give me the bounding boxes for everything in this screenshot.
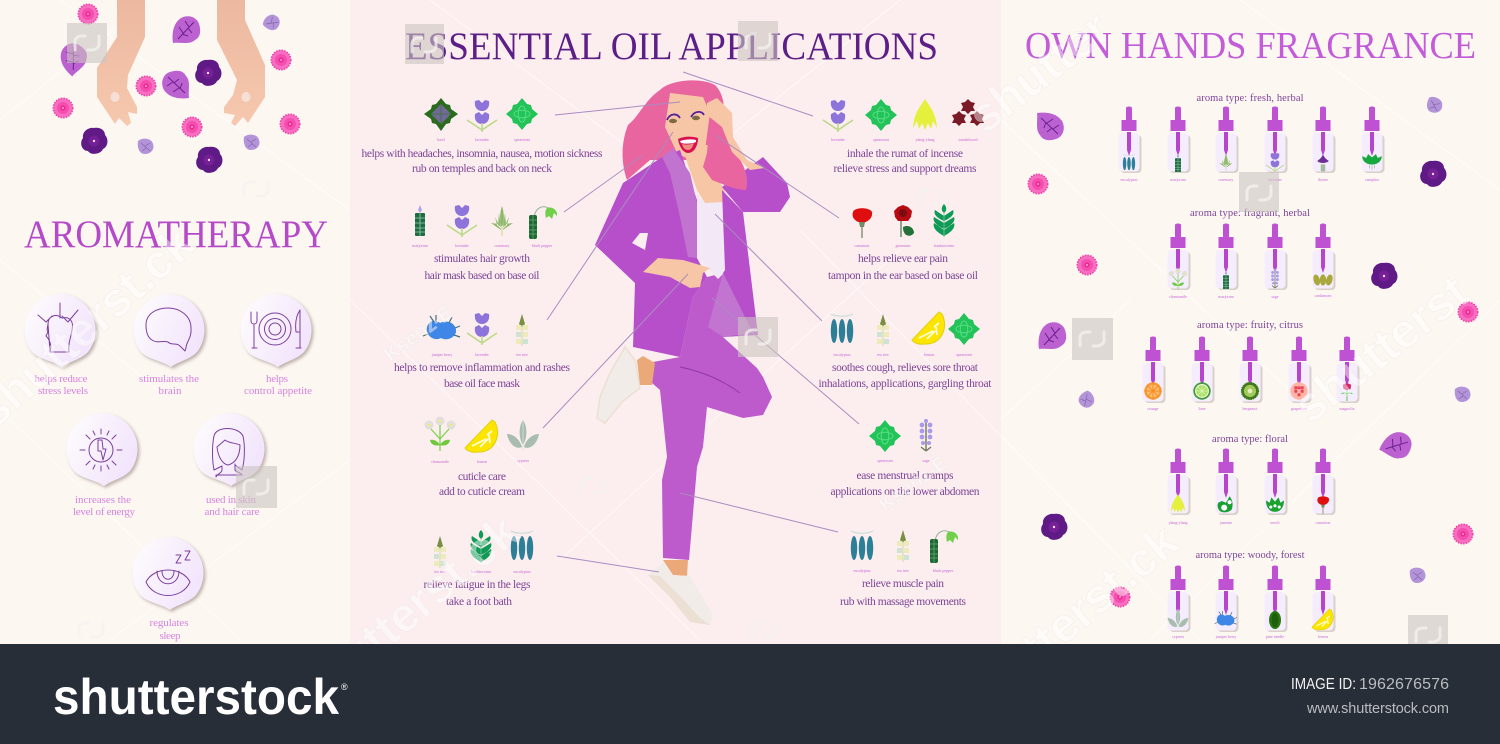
benefit: skin and hair: used in skin — [206, 494, 256, 506]
aroma group: fragrant, herbal: aroma type: fragrant, herbal — [1190, 208, 1310, 219]
watermarks: shutterst — [1284, 265, 1479, 434]
aroma group: fragrant, herbal: sage — [1271, 294, 1279, 299]
watermarks: Ksenz-E — [380, 302, 457, 366]
application: tired legs: relieve fatigue in the legs — [424, 579, 531, 591]
aroma group: fruity, citrus: grapefruit — [1291, 406, 1308, 411]
illustration: jacket right side — [722, 190, 758, 337]
illustration: raised hand — [707, 98, 765, 170]
application: headaches: rub on temples and back on neck — [412, 163, 552, 175]
application: inflammation: juniper berry — [431, 352, 452, 357]
aroma group: floral: aroma type: floral — [1212, 434, 1288, 445]
illustration: raised arm sleeve — [722, 157, 790, 212]
aroma group: fruity, citrus: lime — [1198, 406, 1206, 411]
leader lines — [543, 72, 859, 572]
aroma group: fragrant, herbal — [1168, 208, 1336, 299]
application: incense: sandalwood — [958, 137, 978, 142]
application: cramps: spearmint — [877, 458, 894, 463]
illustration: hand on hip — [643, 258, 710, 288]
application: incense: ylang-ylang — [915, 137, 935, 142]
application: headaches: lavender — [475, 137, 490, 142]
application: inflammation: helps to remove inflammation and rashes — [394, 362, 571, 374]
application: cramps: sage — [922, 458, 930, 463]
illustration: mouth — [678, 137, 698, 153]
benefit: sleep: regulates — [150, 617, 188, 629]
heading: aromatherapy: AROMATHERAPY — [24, 213, 328, 256]
benefit: skin and hair: and hair care — [204, 506, 260, 518]
illustration: standing foot — [663, 560, 688, 576]
aroma group: fruity, citrus: bergamot — [1242, 406, 1258, 411]
application: cough: tea tree — [877, 352, 889, 357]
application: muscle pain: tea tree — [897, 568, 909, 573]
illustration: legs and pants — [652, 273, 772, 560]
image id number: 1962676576 — [1359, 676, 1449, 693]
application: hair growth: stimulates hair growth — [434, 253, 530, 265]
aroma group: woody, forest: juniper berry — [1215, 634, 1236, 639]
aroma group: fresh, herbal: camphor — [1365, 177, 1380, 182]
application: cough: inhalations, applications, gargling throat — [818, 378, 992, 390]
decorative flowers and leaves — [1028, 95, 1478, 607]
application: cuticle care: chamomile — [431, 459, 449, 464]
application: headaches — [362, 98, 603, 175]
application: tired legs: frankincense — [471, 569, 491, 574]
illustration: eyes and brows — [667, 112, 704, 123]
watermarks: shutterst.ck — [286, 505, 529, 720]
illustration: jacket left side — [595, 150, 707, 357]
illustration: neck and chest — [682, 145, 725, 205]
benefit: brain: stimulates the — [139, 373, 199, 385]
aroma group: floral: carnation — [1316, 520, 1330, 525]
application: cuticle care: cypress — [517, 458, 529, 463]
logo: shutterstock: shutterstock — [53, 669, 339, 725]
background: centre panel — [350, 0, 1001, 644]
aroma group: fragrant, herbal: cardamom — [1315, 293, 1332, 298]
icon: left hand — [97, 0, 145, 126]
application: tired legs — [424, 530, 533, 608]
application: cough: soothes cough, relieves sore throat — [832, 362, 979, 374]
application: incense — [823, 99, 984, 175]
aroma group: woody, forest: cypress — [1172, 634, 1184, 639]
benefit: stress: helps reduce — [34, 373, 88, 385]
application: muscle pain: relieve muscle pain — [862, 578, 944, 590]
aroma group: fresh, herbal: rosemary — [1219, 177, 1233, 182]
icon: right hand — [217, 0, 265, 126]
aroma group: fragrant, herbal: marjoram — [1218, 294, 1235, 299]
background: left panel — [0, 0, 350, 644]
application: hair growth: black pepper — [532, 243, 553, 248]
application: cough: eucalyptus — [833, 352, 851, 357]
application: tired legs: take a foot bath — [446, 596, 512, 608]
aroma group: woody, forest: lemon — [1318, 634, 1328, 639]
benefit: skin and hair — [193, 413, 267, 518]
application: muscle pain: black pepper — [933, 568, 954, 573]
aroma group: woody, forest: aroma type: woody, forest — [1196, 550, 1305, 561]
aroma group: woody, forest: pine needle — [1266, 634, 1284, 639]
aroma group: fruity, citrus: aroma type: fruity, citrus — [1197, 320, 1303, 331]
benefit: energy: increases the — [75, 494, 131, 506]
panel: own hands fragrance — [1025, 25, 1478, 639]
watermarks: shutter — [959, 2, 1120, 144]
application: ear pain: geranium — [895, 243, 911, 248]
heading: own hands fragrance: OWN HANDS FRAGRANCE — [1025, 25, 1476, 67]
aroma group: floral — [1168, 434, 1336, 525]
application: muscle pain: rub with massage movements — [840, 596, 967, 608]
illustration: hair — [623, 80, 730, 180]
aroma group: floral: jasmine — [1219, 520, 1232, 525]
application: tired legs: tea tree — [434, 569, 446, 574]
application: ear pain: carnation — [855, 243, 869, 248]
application: cramps — [830, 419, 980, 498]
aroma group: floral: neroli — [1270, 520, 1281, 525]
illustration: hair falling on the right — [703, 113, 747, 190]
application: ear pain — [828, 204, 978, 282]
aroma group: fresh, herbal: thyme — [1318, 177, 1328, 182]
panel: aromatherapy — [24, 0, 328, 642]
application: headaches: spearmint — [514, 137, 531, 142]
aroma group: fruity, citrus: magnolia — [1340, 406, 1355, 411]
application: cramps: applications on the lower abdomen — [830, 486, 980, 498]
application: hair growth: hair mask based on base oil — [424, 270, 540, 282]
application: inflammation — [394, 313, 571, 390]
image id label: IMAGE ID: — [1291, 676, 1356, 693]
heading: essential oil applications: ESSENTIAL OIL APPLICATIONS — [405, 25, 938, 68]
benefit: energy — [66, 413, 140, 518]
aroma group: fresh, herbal: lavender — [1268, 177, 1283, 182]
aroma group: fresh, herbal: aroma type: fresh, herbal — [1196, 93, 1304, 104]
application: inflammation: lavender — [475, 352, 490, 357]
application: muscle pain: eucalyptus — [853, 568, 871, 573]
aroma group: fresh, herbal: marjoram — [1170, 177, 1187, 182]
application: headaches: basil — [437, 137, 446, 142]
benefit: energy: level of energy — [73, 506, 136, 518]
illustration: woman in purple suit — [595, 80, 790, 625]
application: cough: spearmint — [956, 352, 973, 357]
application: incense: lavender — [831, 137, 846, 142]
application: cough — [818, 312, 992, 390]
application: incense: inhale the rumat of incense — [847, 148, 963, 160]
benefit: appetite — [240, 294, 314, 397]
application: muscle pain — [840, 530, 967, 608]
application: incense: relieve stress and support dreams — [834, 163, 977, 175]
watermarks: Ksenz-E — [875, 452, 952, 516]
application: hair growth: marjoram — [412, 243, 429, 248]
application: ear pain: helps relieve ear pain — [858, 253, 948, 265]
application: incense: spearmint — [873, 137, 890, 142]
application: ear pain: frankincense — [934, 243, 954, 248]
application: cuticle care: cuticle care — [458, 471, 506, 483]
application: ear pain: tampon in the ear based on base oil — [828, 270, 978, 282]
benefit: stress — [24, 294, 98, 397]
application: cuticle care: add to cuticle cream — [439, 486, 525, 498]
benefit: appetite: helps — [266, 373, 288, 385]
application: headaches: helps with headaches, insomnia, nausea, motion sickness — [362, 148, 603, 160]
watermarks: shutterst.ck — [946, 515, 1189, 730]
illustration: face — [665, 93, 710, 160]
registered mark: ® — [341, 682, 348, 692]
application: hair growth: lavender — [455, 243, 470, 248]
background: right panel — [1001, 0, 1500, 644]
application: inflammation: base oil face mask — [444, 378, 520, 390]
application: cramps: ease menstrual cramps — [856, 470, 954, 482]
benefit: appetite: control appetite — [244, 385, 312, 397]
application: tired legs: eucalyptus — [513, 569, 531, 574]
illustration: raised shoe — [597, 347, 640, 423]
application: cuticle care: lemon — [477, 459, 487, 464]
aroma group: woody, forest — [1168, 550, 1336, 639]
aroma group: fruity, citrus — [1142, 320, 1360, 411]
benefit: sleep — [132, 537, 206, 642]
application: hair growth: rosemary — [495, 243, 509, 248]
website: www.shutterstock.com — [1306, 701, 1449, 717]
application: inflammation: tea tree — [516, 352, 528, 357]
aroma group: fresh, herbal: eucalyptus — [1120, 177, 1138, 182]
panel: essential oil applications — [362, 25, 992, 625]
footer bar — [0, 644, 1500, 744]
aroma group: fruity, citrus: orange — [1148, 406, 1159, 411]
benefit: brain — [133, 294, 207, 397]
application: cuticle care — [424, 416, 539, 498]
benefit: stress: stress levels — [38, 385, 88, 397]
aroma group: floral: ylang-ylang — [1168, 520, 1188, 525]
benefit: sleep: sleep — [160, 630, 181, 642]
illustration: hands with falling flowers — [53, 0, 300, 173]
benefit: brain: brain — [158, 385, 182, 397]
application: hair growth — [412, 205, 557, 282]
application: cough: lemon — [924, 352, 934, 357]
illustration: shirt — [697, 193, 725, 279]
aroma group: fresh, herbal — [1118, 93, 1384, 182]
aroma group: fragrant, herbal: chamomile — [1169, 294, 1187, 299]
